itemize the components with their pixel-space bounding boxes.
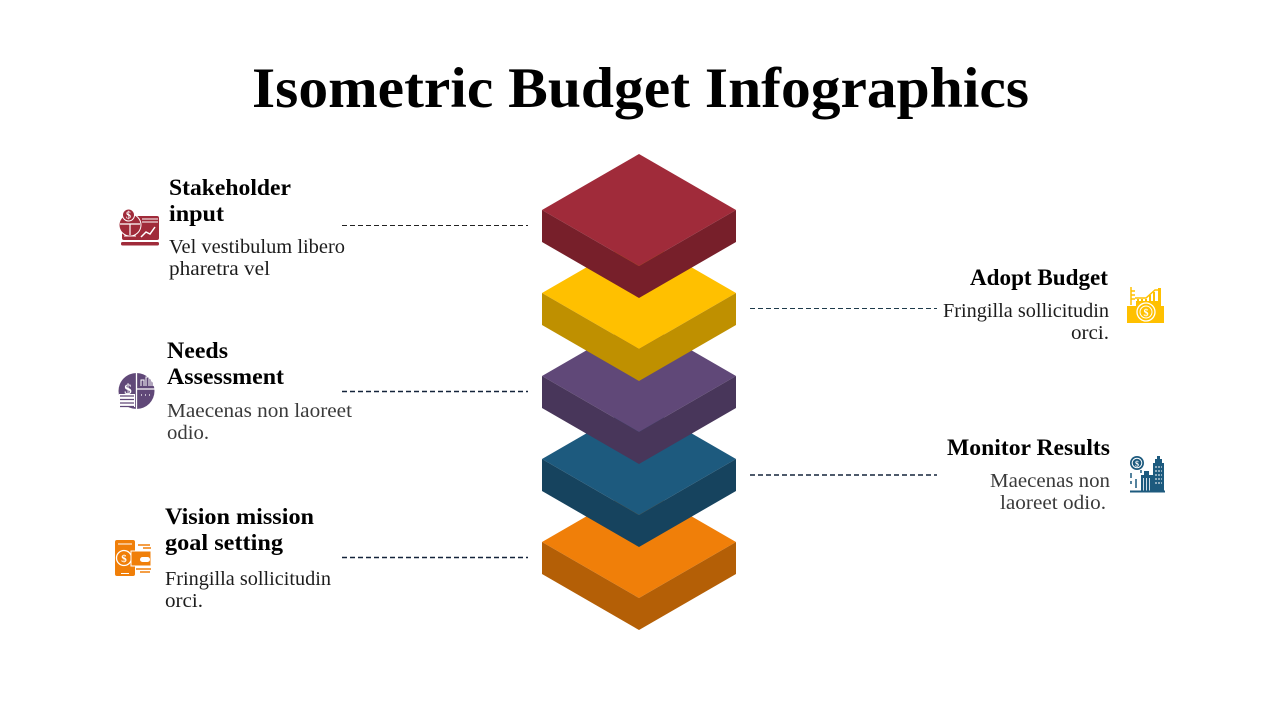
- connector: needs assessment: [342, 390, 528, 392]
- connector: monitor results: [750, 474, 937, 476]
- description: Maecenas non: [990, 470, 1110, 492]
- description: orci.: [165, 590, 203, 612]
- connector: adopt budget: [750, 308, 937, 310]
- block: stakeholder input: [169, 175, 345, 280]
- icon: money growth: [1127, 287, 1164, 323]
- description: [943, 300, 1109, 344]
- heading: Adopt Budget: [970, 265, 1108, 290]
- connector: stakeholder input: [342, 224, 528, 226]
- layer: purple: [542, 320, 736, 464]
- heading: Monitor Results: [947, 435, 1110, 460]
- connector: vision mission: [342, 556, 528, 558]
- heading: Needs: [167, 338, 228, 363]
- title: Isometric Budget Infographics: [252, 57, 1029, 120]
- description: Vel vestibulum libero: [169, 236, 345, 258]
- icon: money growth: $: [1144, 308, 1148, 319]
- block: adopt budget: [943, 265, 1109, 344]
- description: laoreet odio.: [1000, 492, 1106, 514]
- icon: budget chart card: $: [126, 210, 131, 222]
- heading: [165, 504, 314, 555]
- description: [169, 236, 345, 280]
- layer: red: [542, 154, 736, 298]
- heading: Assessment: [167, 364, 284, 389]
- description: Maecenas non laoreet: [167, 400, 352, 422]
- layer: yellow: [542, 237, 736, 381]
- icon: budget chart card: [118, 209, 159, 246]
- description: pharetra vel: [169, 258, 270, 280]
- layer: orange: [542, 486, 736, 630]
- icon: pie with coins: [118, 372, 155, 410]
- description: [167, 400, 352, 444]
- heading: input: [169, 201, 224, 226]
- icon: pie with coins: $: [124, 382, 132, 398]
- description: [165, 568, 331, 612]
- icon: phone and card: [115, 540, 151, 576]
- icon: coin and buildings: [1130, 456, 1165, 492]
- description: [990, 470, 1110, 514]
- description: odio.: [167, 422, 209, 444]
- icon: coin and buildings: $: [1135, 460, 1139, 468]
- icon: phone and card: $: [121, 553, 127, 565]
- heading: [169, 175, 291, 226]
- block: monitor results: [947, 435, 1110, 514]
- block: vision mission goal setting: [165, 504, 331, 612]
- heading: [167, 338, 284, 389]
- heading: Stakeholder: [169, 175, 291, 200]
- description: Fringilla sollicitudin: [943, 300, 1109, 322]
- description: orci.: [1071, 322, 1109, 344]
- block: needs assessment: [167, 338, 352, 444]
- isometric stack: [542, 154, 736, 630]
- heading: goal setting: [165, 530, 284, 555]
- heading: Vision mission: [165, 504, 314, 529]
- description: Fringilla sollicitudin: [165, 568, 331, 590]
- layer: blue: [542, 403, 736, 547]
